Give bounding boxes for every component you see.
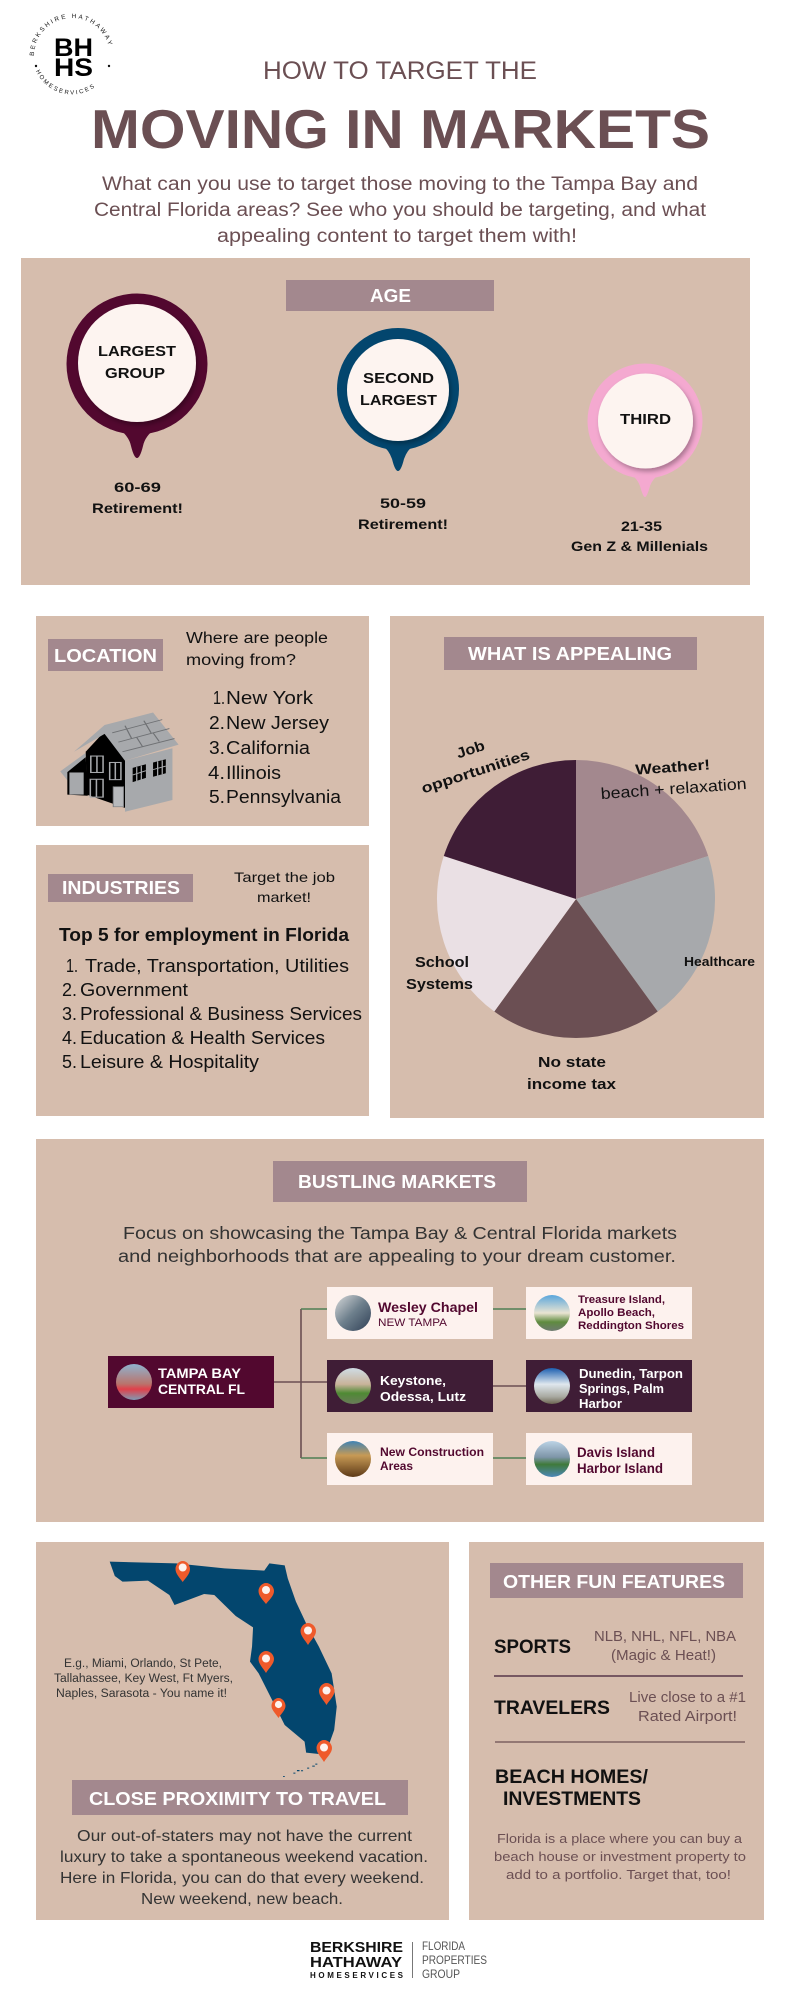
list: origin states: 1. [213,688,225,708]
feature: beach homes: BEACH HOMES/ [495,1767,649,1788]
list: origin states: New Jersey [226,713,329,733]
heading: location [48,639,163,671]
feature: beach homes: beach house or investment property to [494,1849,746,1864]
node: New Construction Areas [327,1433,493,1485]
heading: other fun features [490,1563,743,1598]
node: Treasure Island [526,1287,692,1339]
pin: third [588,364,702,497]
map caption: Naples, Sarasota - You name it! [56,1688,227,1700]
travel description: luxury to take a spontaneous weekend vacation. [60,1849,428,1866]
list: top industries: Trade, Transportation, Utilities [85,956,349,976]
node: Treasure Island: Treasure Island, [578,1294,665,1306]
pie label: no state income tax [527,1055,616,1093]
feature: travelers [494,1690,746,1725]
map: Florida [110,1562,337,1777]
node: Keystone, Odessa, Lutz [327,1360,493,1412]
intro text [94,174,707,247]
list: origin states: 5. [209,787,225,807]
job market note: Target the job [234,869,335,885]
feature: travelers: Rated Airport! [638,1709,737,1725]
pie label: healthcare: Healthcare [684,955,755,969]
node: Tampa Bay Central FL [108,1356,274,1408]
heading: industries [48,874,193,902]
logo: BHHS seal: HOMESERVICES [36,70,94,94]
job market note: market! [257,889,311,905]
label: 21-35 [571,518,708,554]
list: top industries: Professional & Business Services [80,1004,362,1024]
list: top industries: Education & Health Services [80,1028,325,1048]
node: Treasure Island: Reddington Shores [578,1320,684,1332]
description [118,1223,677,1266]
intro text: appealing content to target them with! [217,226,577,247]
pie label: job opportunities: opportunities [420,747,532,797]
label: 50-59 [358,495,448,532]
node: Davis Island, Harbor Island: Harbor Island [577,1461,663,1476]
panel: industries [36,845,369,1116]
label: 21-35: Gen Z & Millenials [571,538,708,554]
feature: sports [494,1629,736,1664]
title block: HOW TO TARGET THE [263,57,537,85]
logo: BHHS seal: BH [54,34,93,62]
label: 50-59: Retirement! [358,516,448,532]
heading: age [286,280,494,311]
node: Treasure Island: Apollo Beach, [578,1307,655,1319]
footer logo: FLORIDA [422,1939,465,1953]
label: 60-69: Retirement! [92,500,183,516]
list: origin states: Illinois [226,763,281,783]
footer logo: GROUP [422,1967,460,1981]
org chart connectors [274,1309,526,1458]
list: origin states: New York [226,688,314,708]
node: Tampa Bay Central FL: TAMPA BAY [158,1366,241,1381]
node: Wesley Chapel [327,1287,493,1339]
travel description: Our out-of-staters may not have the current [77,1828,413,1845]
footer logo: HOMESERVICES [310,1971,404,1980]
node: Dunedin, Tarpon Springs, Palm Harbor [526,1360,692,1412]
pie label: job opportunities: Job [455,738,487,762]
pin: second largest [337,328,459,471]
node: Davis Island, Harbor Island: Davis Island [577,1445,655,1460]
map caption: E.g., Miami, Orlando, St Pete, [64,1658,222,1670]
footer logo: BERKSHIRE [310,1940,403,1956]
pie label: no state income tax: No state [538,1055,606,1071]
label: 60-69: 60-69 [114,479,161,495]
map caption: Tallahassee, Key West, Ft Myers, [54,1673,233,1685]
heading: bustling markets: BUSTLING MARKETS [298,1172,496,1192]
node: New Construction Areas: New Construction [380,1447,484,1459]
node: Dunedin, Tarpon Springs, Palm Harbor: Springs, Palm [579,1382,664,1396]
panel: other fun features [469,1542,764,1920]
heading: age: AGE [370,286,411,306]
list: top industries: Government [80,980,188,1000]
list: top industries: 3. [62,1004,77,1024]
list: top industries: 1. [66,956,78,976]
pie label: school systems: School [415,955,469,971]
map pins [176,1561,334,1762]
heading: industries: INDUSTRIES [62,878,180,898]
heading: location: LOCATION [54,646,157,666]
heading: close proximity to travel: CLOSE PROXIMITY TO TRAVEL [89,1789,386,1809]
label: 21-35: 21-35 [621,518,662,534]
pin: second largest: SECOND [363,370,434,387]
title block [91,57,710,160]
list: origin states: California [226,738,311,758]
icon: house [60,712,179,812]
location question: Where are people [186,630,328,647]
location question: moving from? [186,652,296,669]
feature: sports: NLB, NHL, NFL, NBA [594,1629,736,1645]
heading: other fun features: OTHER FUN FEATURES [503,1572,725,1592]
travel description: New weekend, new beach. [141,1891,343,1908]
subheading: top 5: Top 5 for employment in Florida [59,925,350,945]
label: 60-69 [92,479,183,516]
list: origin states: Pennsylvania [226,787,342,807]
pie label: school systems: Systems [406,977,473,993]
logo: BHHS seal: HS [54,54,93,82]
footer logo: PROPERTIES [422,1953,487,1967]
heading: what is appealing [444,637,697,670]
title block: MOVING IN MARKETS [91,98,710,160]
pin: largest group [66,294,208,458]
pin: second largest: LARGEST [360,392,437,409]
node: Keystone, Odessa, Lutz: Odessa, Lutz [380,1389,467,1404]
pin: third: THIRD [620,411,671,428]
travel description: Here in Florida, you can do that every weekend. [60,1870,424,1887]
feature: travelers: TRAVELERS [494,1698,610,1719]
heading: bustling markets [273,1161,527,1202]
heading: close proximity to travel [72,1780,408,1815]
node: Wesley Chapel: Wesley Chapel [378,1300,478,1315]
list: top industries: 4. [62,1028,77,1048]
pie label: weather: beach + relaxation [600,776,747,803]
pie chart [437,760,715,1038]
travel description [60,1828,428,1908]
node: Dunedin, Tarpon Springs, Palm Harbor: Harbor [579,1397,622,1411]
feature: sports: SPORTS [494,1637,571,1658]
description: Focus on showcasing the Tampa Bay & Central Florida markets [123,1223,677,1243]
panel: bustling markets [36,1139,764,1522]
node: Dunedin, Tarpon Springs, Palm Harbor: Dunedin, Tarpon [579,1367,683,1381]
pie label: no state income tax: income tax [527,1077,616,1093]
feature: beach homes [494,1767,746,1882]
feature: beach homes: Florida is a place where you can buy a [497,1831,743,1846]
label: 50-59: 50-59 [380,495,426,511]
pin: largest group: GROUP [105,365,165,382]
pie label: weather: Weather! [635,757,711,779]
node: Keystone, Odessa, Lutz: Keystone, [380,1373,446,1388]
list: top industries: Leisure & Hospitality [80,1052,259,1072]
feature: travelers: Live close to a #1 [629,1690,746,1706]
pie label: weather [600,757,747,803]
feature: beach homes: INVESTMENTS [503,1789,641,1810]
pie label: school systems [406,955,473,993]
list: origin states: 2. [209,713,225,733]
list: origin states [208,688,342,807]
panel: close proximity to travel [36,1542,449,1920]
panel: location [36,616,369,826]
node: Davis Island, Harbor Island [526,1433,692,1485]
job market note [234,869,335,905]
list: top industries: 5. [62,1052,77,1072]
intro text: What can you use to target those moving to the Tampa Bay and [102,174,698,195]
heading: what is appealing: WHAT IS APPEALING [468,644,672,664]
list: top industries: 2. [62,980,77,1000]
location question [186,630,328,669]
logo: BHHS seal: BERKSHIRE HATHAWAY [30,14,112,56]
panel: what is appealing [390,616,764,1118]
list: origin states: 4. [208,763,225,783]
node: Tampa Bay Central FL: CENTRAL FL [158,1382,245,1397]
pin: largest group: LARGEST [98,343,176,360]
list: origin states: 3. [209,738,225,758]
pie label: job opportunities [420,738,532,797]
map caption [54,1658,233,1700]
list: top industries [62,956,362,1072]
logo: BHHS seal [30,14,112,94]
feature: beach homes: add to a portfolio. Target that, too! [506,1867,731,1882]
node: Wesley Chapel: NEW TAMPA [378,1317,448,1329]
panel: age [21,258,750,585]
feature: sports: (Magic & Heat!) [611,1648,716,1664]
intro text: Central Florida areas? See who you should be targeting, and what [94,200,707,221]
footer logo [310,1939,487,1981]
description: and neighborhoods that are appealing to your dream customer. [118,1246,676,1266]
node: New Construction Areas: Areas [380,1461,413,1473]
footer logo: HATHAWAY [310,1955,402,1971]
